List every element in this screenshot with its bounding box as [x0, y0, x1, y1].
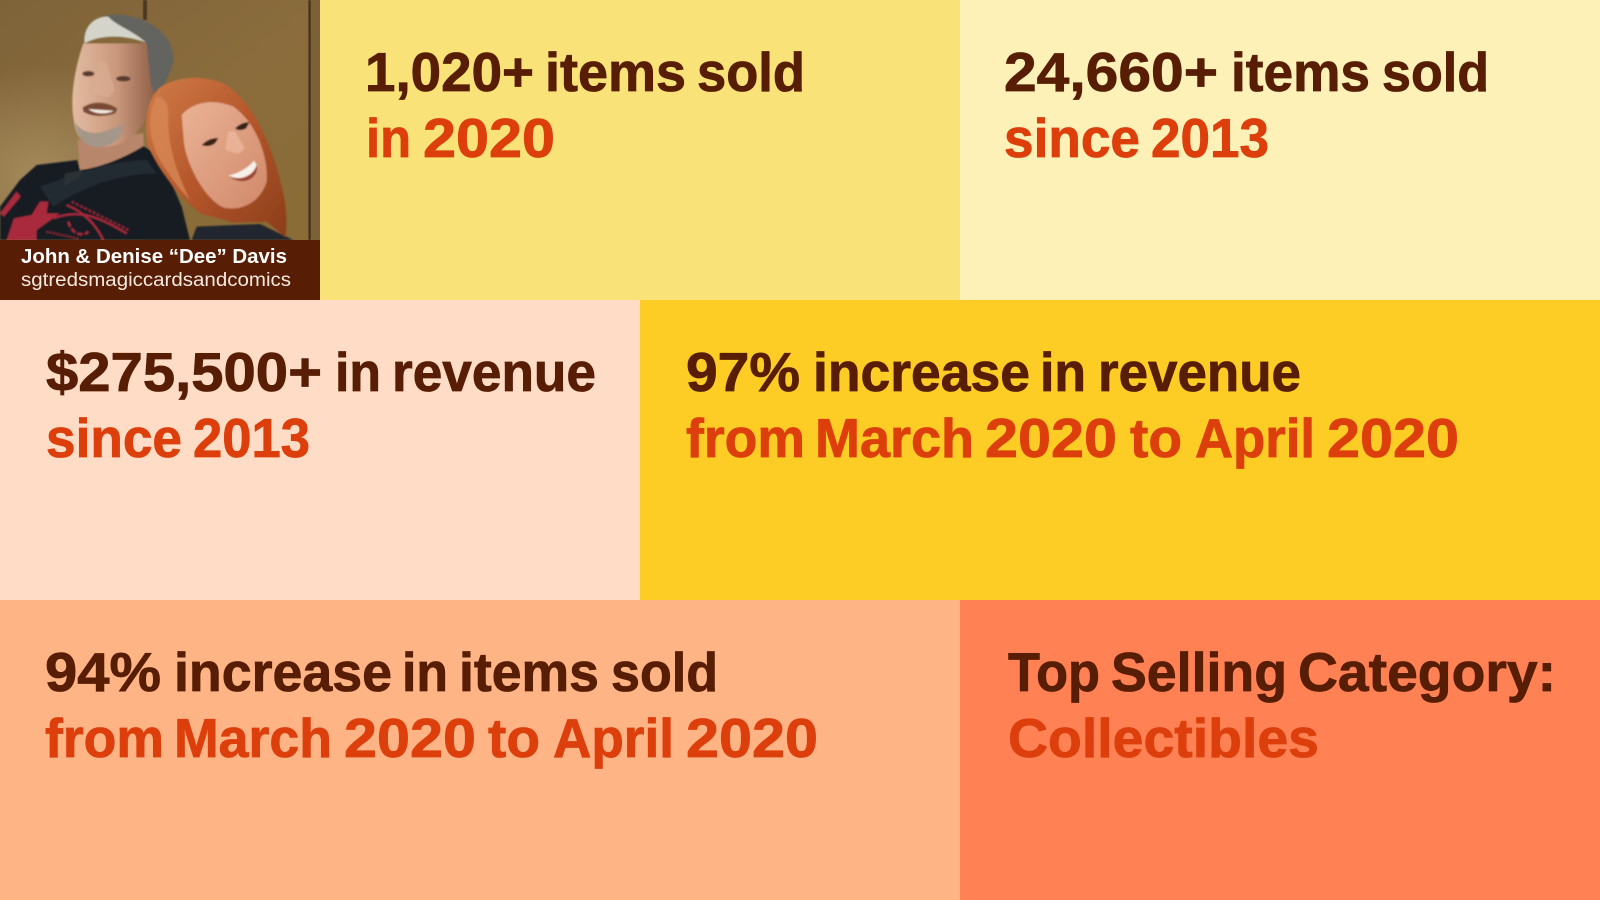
stat: items sold 2020: 1,020+ [365, 41, 534, 103]
stat: total items sold: 24,660+ [1004, 41, 1218, 103]
panel: items sold in 2020 [320, 0, 960, 300]
stat: items sold increase [45, 641, 718, 703]
heading: top selling category: Category: [1298, 641, 1556, 703]
stat: revenue increase [686, 341, 1301, 403]
shop name: sgtredsmagiccardsandcomics [21, 270, 291, 291]
stat period: March to April 2020: March [174, 707, 332, 769]
stat: items sold increase: increase [174, 641, 392, 703]
stat: items sold increase: in [402, 641, 448, 703]
stat: total items sold: sold [1382, 41, 1489, 103]
stat: revenue increase: revenue [1098, 341, 1301, 403]
heading: top selling category: Top [1008, 641, 1100, 703]
stat: items sold increase: 94% [45, 641, 161, 703]
woman [146, 78, 293, 240]
stat period: since 2013 [1004, 107, 1269, 169]
seller names: John & Denise “Dee” Davis [21, 246, 287, 268]
stat: revenue increase: increase [813, 341, 1030, 403]
stat period: since 2013: since [46, 407, 182, 469]
stat: items sold increase: sold [611, 641, 718, 703]
stat: total revenue: revenue [392, 341, 596, 403]
stat: total items sold: items [1231, 41, 1370, 103]
panel: revenue increase [640, 300, 1600, 600]
stat period: March to April 2020: to [488, 707, 540, 769]
stat period: March to April 2020: 2020 [1327, 407, 1459, 469]
stat period: in 2020 [366, 107, 555, 169]
panel: items sold since 2013 [960, 0, 1600, 300]
stat period: in 2020: in [366, 107, 411, 169]
stat period: March to April 2020 [686, 407, 1459, 469]
stat period: March to April 2020: from [45, 707, 164, 769]
panel: items sold increase [0, 600, 960, 900]
stat: total revenue: in [335, 341, 381, 403]
stat period: in 2020: 2020 [423, 107, 555, 169]
stat: revenue increase: 97% [686, 341, 800, 403]
stat: items sold 2020: items [545, 41, 686, 103]
stat period: March to April 2020: 2020 [686, 707, 818, 769]
caption: seller names and shop [21, 246, 291, 291]
stat period: March to April 2020: March [815, 407, 974, 469]
stat period: since 2013: 2013 [193, 407, 310, 469]
stat period: March to April 2020: April [553, 707, 674, 769]
photo: John and Denise Davis [0, 0, 320, 240]
stat: total revenue: $275,500+ [46, 341, 322, 403]
heading: top selling category [1008, 641, 1556, 703]
category: collectibles: Collectibles [1008, 707, 1319, 769]
stat period: March to April 2020: April [1195, 407, 1315, 469]
stat period: March to April 2020: to [1130, 407, 1182, 469]
heading: top selling category: Selling [1111, 641, 1287, 703]
stat period: March to April 2020: 2020 [344, 707, 476, 769]
stat period: since 2013: since [1004, 107, 1140, 169]
stat period: since 2013: 2013 [1151, 107, 1269, 169]
stat: revenue increase: in [1040, 341, 1086, 403]
panel: revenue since 2013 [0, 300, 640, 600]
stat: total revenue [46, 341, 596, 403]
stat period: March to April 2020 [45, 707, 818, 769]
panel: seller photo with caption [0, 0, 320, 300]
panel: top selling category [960, 600, 1600, 900]
man [0, 15, 190, 240]
stat period: March to April 2020: from [686, 407, 805, 469]
stat: total items sold [1004, 41, 1489, 103]
stat: items sold increase: items [459, 641, 599, 703]
stat: items sold 2020 [365, 41, 805, 103]
stat: items sold 2020: sold [697, 41, 805, 103]
stat period: March to April 2020: 2020 [985, 407, 1117, 469]
stat period: since 2013 [46, 407, 310, 469]
